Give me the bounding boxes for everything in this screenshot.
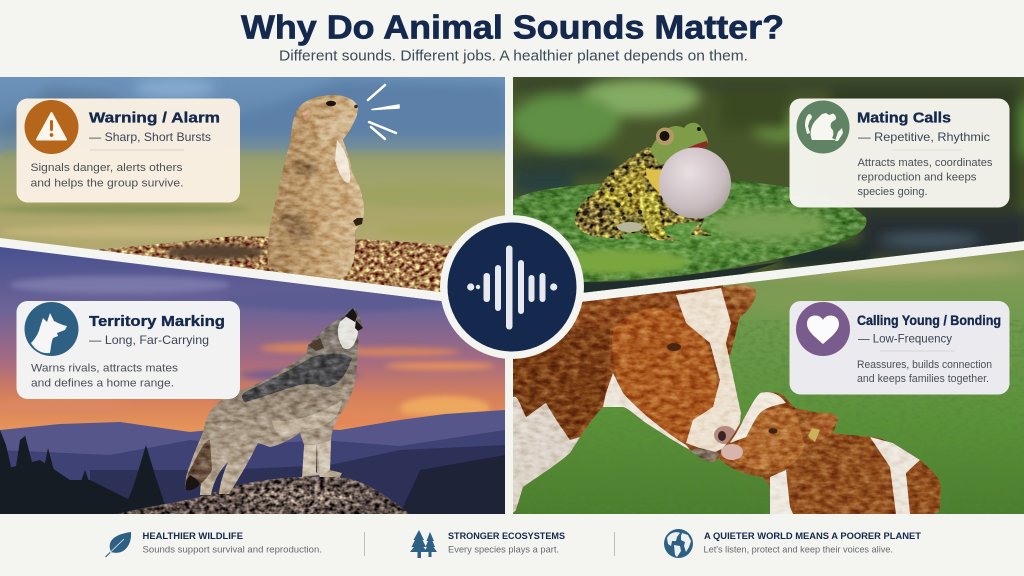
rock <box>118 477 410 514</box>
conifer trees <box>0 430 175 514</box>
icon: globe <box>664 529 693 558</box>
card: calling young / bonding: and keeps families together. <box>857 373 989 385</box>
footer: stronger ecosystems: STRONGER ECOSYSTEMS <box>448 531 565 541</box>
calf <box>720 392 941 514</box>
card: mating calls: — Repetitive, Rhythmic <box>858 130 990 144</box>
sound lines <box>368 85 399 139</box>
card: warning / alarm <box>16 98 240 202</box>
card: calling young / bonding: Calling Young / Bonding <box>857 312 1001 328</box>
card: territory marking: and defines a home range. <box>31 378 174 390</box>
icon: frog <box>796 100 850 154</box>
prairie dog <box>267 95 364 279</box>
center sound wave badge <box>440 215 584 359</box>
card: calling young / bonding <box>790 301 1010 394</box>
card: territory marking: Warns rivals, attracts mates <box>31 362 179 374</box>
title: Why Do Animal Sounds Matter? <box>241 8 784 46</box>
footer divider left <box>364 532 365 556</box>
card: mating calls: Attracts mates, coordinates <box>858 157 993 169</box>
panel: territory marking photo with wolf <box>0 245 505 514</box>
cow face details <box>667 343 736 444</box>
icon: waveform <box>467 246 557 330</box>
card: mating calls <box>790 98 1010 208</box>
subtitle: Different sounds. Different jobs. A healthier planet depends on them. <box>279 48 748 64</box>
wolf muzzle and tail details <box>186 308 363 490</box>
panel: mating calls photo with frog <box>500 77 1024 307</box>
footer: healthier wildlife: Sounds support survival and reproduction. <box>142 544 322 556</box>
footer: a quieter world: Let's listen, protect and keep their voices alive. <box>704 544 893 556</box>
icon: trees <box>410 530 437 558</box>
card: territory marking <box>16 301 240 399</box>
frog <box>575 123 731 241</box>
footer: healthier wildlife <box>106 531 322 557</box>
footer divider right <box>614 532 615 556</box>
card: calling young / bonding: — Low-Frequency <box>858 332 952 346</box>
card: territory marking: Territory Marking <box>89 313 225 330</box>
wolf <box>185 308 363 495</box>
card: territory marking: — Long, Far-Carrying <box>89 333 209 347</box>
prairie dog face details <box>326 101 363 226</box>
card: warning / alarm: Signals danger, alerts others <box>30 162 183 174</box>
card: warning / alarm: and helps the group survive. <box>30 178 184 190</box>
dirt mound <box>97 236 453 292</box>
card: mating calls: Mating Calls <box>857 110 951 126</box>
panel: warning / alarm photo with prairie dog <box>0 77 505 292</box>
footer: stronger ecosystems: Every species plays a part. <box>448 544 559 556</box>
footer: stronger ecosystems <box>410 530 565 558</box>
card: warning / alarm: — Sharp, Short Bursts <box>89 130 211 144</box>
calf face details <box>721 428 820 460</box>
footer: a quieter world: A QUIETER WORLD MEANS A POORER PLANET <box>704 531 922 541</box>
icon: heart <box>796 302 850 356</box>
card: calling young / bonding: Reassures, builds connection <box>857 359 992 371</box>
footer: healthier wildlife: HEALTHIER WILDLIFE <box>142 531 243 541</box>
icon: warning triangle <box>24 100 78 154</box>
panel: calling young photo with cow and calf <box>513 245 1024 515</box>
card: mating calls: species going. <box>858 186 928 198</box>
card: warning / alarm: Warning / Alarm <box>89 110 220 126</box>
icon: leaf <box>106 532 131 557</box>
lily pad <box>513 180 866 293</box>
mother cow <box>513 270 756 513</box>
footer: a quieter world <box>664 529 922 558</box>
card: mating calls: reproduction and keeps <box>858 172 977 184</box>
icon: wolf head <box>24 302 78 356</box>
